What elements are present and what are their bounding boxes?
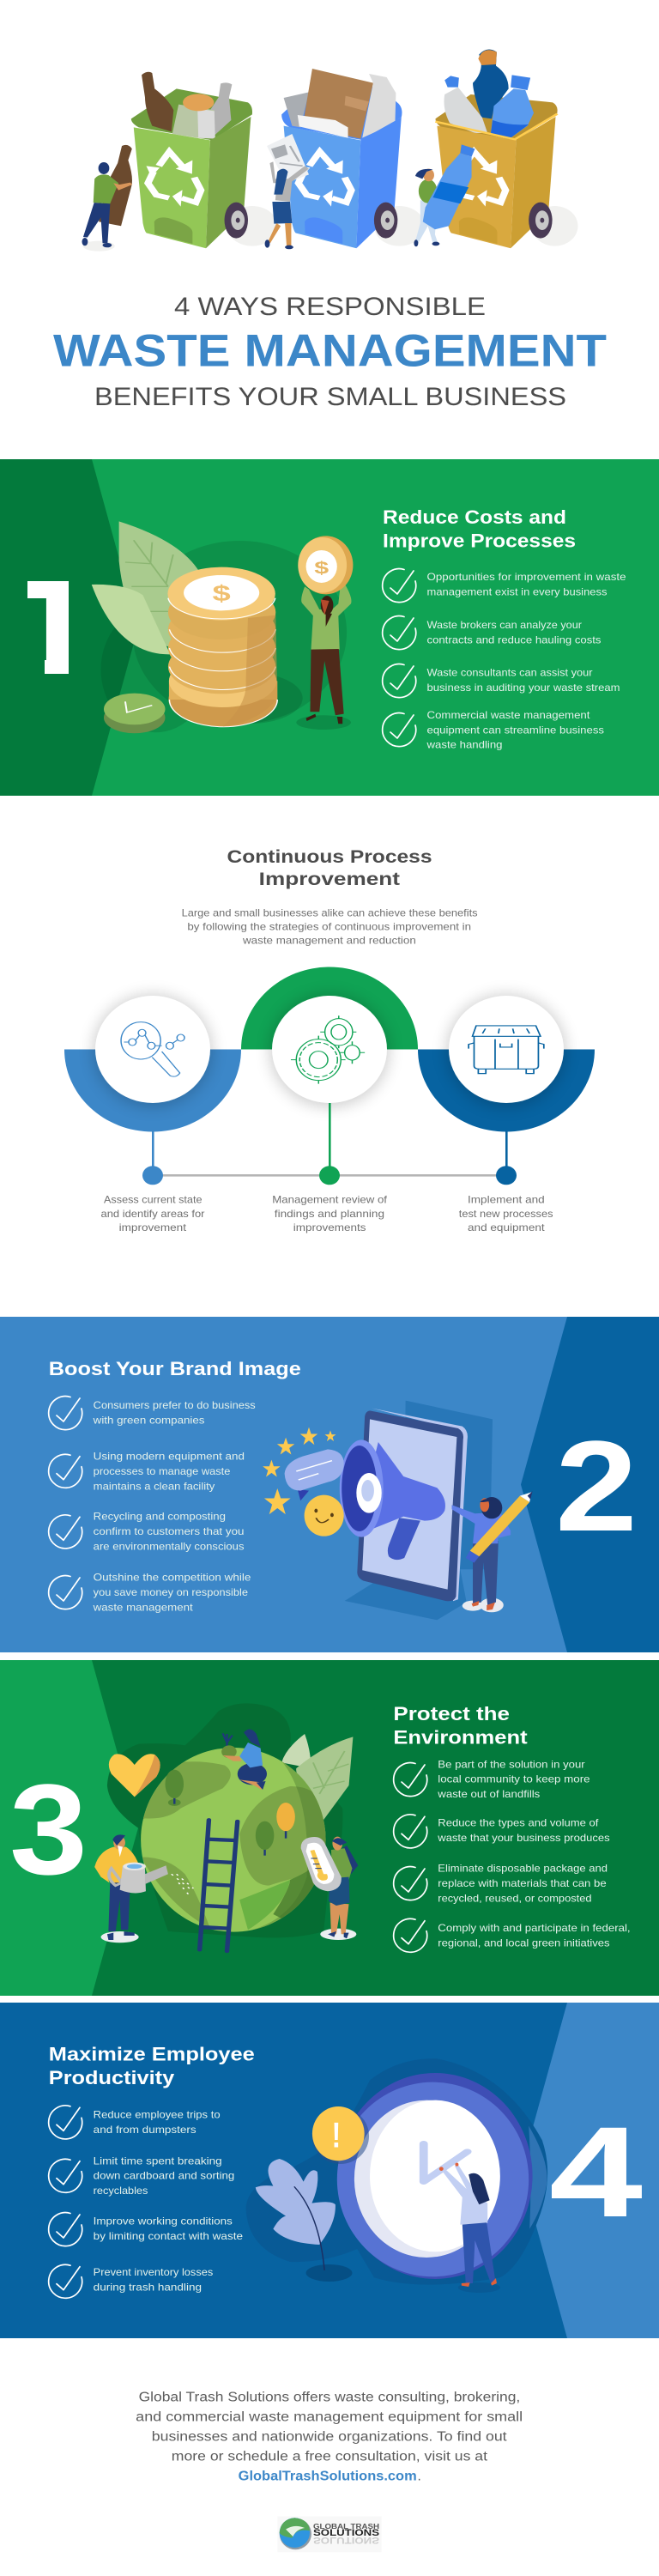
checklist item 2: recyclables [94, 2185, 148, 2197]
title: 4 WAYS RESPONSIBLE [174, 293, 486, 321]
panel: protect the environment [0, 1660, 659, 1996]
number 3: 3 [9, 1757, 88, 1901]
checklist item 2: maintains a clean facility [94, 1480, 215, 1492]
number 1 [27, 581, 69, 674]
arc: green [241, 967, 418, 1049]
title: BENEFITS YOUR SMALL BUSINESS [94, 383, 566, 411]
heading [49, 2043, 255, 2088]
circle: dumpster icon [449, 996, 564, 1103]
illustration: three recycling bins with people [82, 50, 577, 252]
checklist item 4 [383, 709, 604, 751]
checklist item 3: by limiting contact with waste [94, 2230, 243, 2242]
heading [393, 1703, 528, 1749]
logo: Global Trash Solutions [277, 2517, 382, 2552]
person holding blue bottle [414, 144, 475, 246]
heading [383, 506, 576, 552]
label: step 1: Assess current state [104, 1194, 203, 1206]
checklist item 3: Recycling and composting [94, 1511, 226, 1523]
checklist item 4 [394, 1918, 631, 1952]
checklist item 4: Comply with and participate in federal, [438, 1922, 631, 1934]
checklist item 1: and from dumpsters [94, 2124, 196, 2136]
checklist item 4: waste handling [426, 739, 503, 751]
bin: green glass [131, 72, 252, 248]
intro paragraph: by following the strategies of continuous improvement in [187, 920, 471, 932]
illustration: clock with person: ! [331, 2116, 341, 2155]
illustration: globe with people [94, 1703, 358, 1951]
label: step 2: findings and planning [275, 1208, 384, 1220]
label: step 2: Management review of [272, 1194, 388, 1206]
intro paragraph [182, 906, 478, 947]
checklist item 2 [49, 2155, 234, 2197]
checklist item 4 [49, 1572, 251, 1613]
heading: Protect the [393, 1703, 510, 1724]
title [53, 293, 607, 411]
panel: boost brand image [0, 1317, 659, 1652]
logo: Global Trash Solutions: SOLUTIONS [313, 2528, 379, 2538]
checklist item 1 [49, 2106, 221, 2139]
checklist item 4 [49, 2264, 213, 2298]
checklist item 1: management exist in every business [427, 585, 608, 597]
label: step 1 [101, 1194, 204, 1233]
checklist item 3: are environmentally conscious [94, 1540, 244, 1552]
label: step 3: and equipment [468, 1221, 545, 1233]
checklist item 4: equipment can streamline business [427, 724, 604, 736]
checklist item 4: waste management [93, 1601, 193, 1613]
heading: continuous process improvement: Improvement [259, 870, 400, 889]
checklist item 1: Consumers prefer to do business [94, 1399, 256, 1411]
heading: Boost Your Brand Image [49, 1358, 301, 1379]
footer text: and commercial waste management equipment for small [136, 2409, 523, 2424]
checklist item 3: Waste consultants can assist your [427, 667, 593, 679]
checklist item 3 [49, 2213, 243, 2246]
label: step 3: Implement and [468, 1194, 545, 1206]
checklist item 2: Using modern equipment and [94, 1451, 245, 1463]
checklist item 1: Opportunities for improvement in waste [427, 571, 626, 583]
footer text [136, 2390, 523, 2483]
panel: maximize employee productivity [0, 2003, 659, 2338]
footer text: more or schedule a free consultation, visit us at [172, 2449, 488, 2464]
checklist item 1: Be part of the solution in your [438, 1758, 585, 1770]
heading: continuous process improvement: Continuous Process [227, 847, 432, 867]
checklist item 2: Waste brokers can analyze your [427, 619, 582, 631]
checklist item 3: replace with materials that can be [438, 1877, 607, 1889]
label: step 2 [272, 1194, 388, 1233]
heading: Reduce Costs and [383, 506, 566, 528]
arc: dark blue [418, 1049, 595, 1131]
heading: continuous process improvement [227, 847, 432, 889]
heading: Environment [393, 1727, 528, 1749]
checklist item 1 [394, 1758, 590, 1800]
number 4: 4 [549, 2100, 643, 2244]
checklist item 2: down cardboard and sorting [94, 2170, 234, 2182]
label: step 1: and identify areas for [101, 1208, 204, 1220]
checklist item 2: waste that your business produces [437, 1832, 610, 1844]
checklist item 3 [49, 1511, 244, 1552]
checklist item 3: Eliminate disposable package and [438, 1863, 608, 1875]
checklist item 3 [383, 664, 620, 698]
illustration: coin stack, leaves and person: $ [213, 580, 231, 606]
checklist item 2: processes to manage waste [94, 1465, 231, 1477]
number 1: 1 [8, 553, 100, 703]
footer text: Global Trash Solutions offers waste consulting, brokering, [139, 2390, 520, 2404]
checklist item 2: Limit time spent breaking [94, 2155, 222, 2167]
logo: Global Trash Solutions: SOLUTIONS [313, 2535, 379, 2545]
checklist item 2 [394, 1815, 610, 1848]
checklist item 4: Commercial waste management [427, 709, 590, 721]
checklist item 1 [383, 569, 626, 603]
illustration: coin stack, leaves and person [92, 521, 353, 733]
checklist item 3: confirm to customers that you [94, 1525, 244, 1537]
circle: gears icon [272, 996, 387, 1103]
checklist item 2 [383, 616, 601, 650]
bin: yellow plastic [435, 50, 558, 248]
checklist item 1 [49, 1397, 256, 1430]
title: WASTE MANAGEMENT [53, 326, 607, 376]
label: step 1: improvement [119, 1221, 187, 1233]
checklist item 3: recycled, reused, or composted [438, 1892, 592, 1904]
checklist item 4: you save money on responsible [94, 1586, 248, 1598]
checklist item 4: Prevent inventory losses [94, 2266, 213, 2278]
footer text: businesses and nationwide organizations. To find out [152, 2429, 507, 2444]
checklist item 1: local community to keep more [438, 1773, 590, 1785]
bin: blue paper [281, 69, 402, 248]
checklist item 4: during trash handling [94, 2281, 202, 2293]
heading: Improve Processes [383, 530, 576, 552]
checklist item 3 [394, 1863, 608, 1904]
illustration: phone and megaphone [263, 1401, 533, 1620]
heading: Productivity [49, 2067, 175, 2088]
checklist item 1: waste out of landfills [437, 1788, 540, 1800]
process diagram [64, 967, 595, 1233]
person holding brown bottle [82, 145, 132, 247]
illustration: coin stack, leaves and person: $ [314, 557, 330, 578]
person holding newspaper [265, 134, 309, 249]
label: step 2: improvements [293, 1221, 366, 1233]
intro paragraph: Large and small businesses alike can achieve these benefits [182, 906, 478, 918]
stems and timeline [142, 1103, 517, 1185]
intro paragraph: waste management and reduction [242, 935, 416, 947]
circle: assess icon [95, 996, 210, 1103]
checklist item 3: Improve working conditions [94, 2215, 233, 2227]
checklist item 4: regional, and local green initiatives [438, 1937, 610, 1949]
checklist item 1: Reduce employee trips to [94, 2109, 221, 2121]
label: step 3 [459, 1194, 553, 1233]
footer text: . [417, 2469, 421, 2483]
heading: Maximize Employee [49, 2043, 255, 2064]
panel: reduce costs [0, 459, 659, 796]
arc: blue [64, 1049, 241, 1131]
footer text: GlobalTrashSolutions.com [239, 2469, 417, 2483]
checklist item 4: Outshine the competition while [94, 1572, 251, 1584]
illustration: clock with person [246, 2058, 547, 2293]
checklist item 2 [49, 1451, 245, 1492]
label: step 3: test new processes [459, 1208, 553, 1220]
checklist item 2: contracts and reduce hauling costs [427, 633, 601, 646]
number 2: 2 [555, 1414, 638, 1558]
checklist item 1: with green companies [93, 1414, 204, 1426]
checklist item 2: Reduce the types and volume of [438, 1817, 599, 1829]
logo: Global Trash Solutions: GLOBAL TRASH [313, 2523, 379, 2531]
checklist item 3: business in auditing your waste stream [427, 682, 620, 694]
